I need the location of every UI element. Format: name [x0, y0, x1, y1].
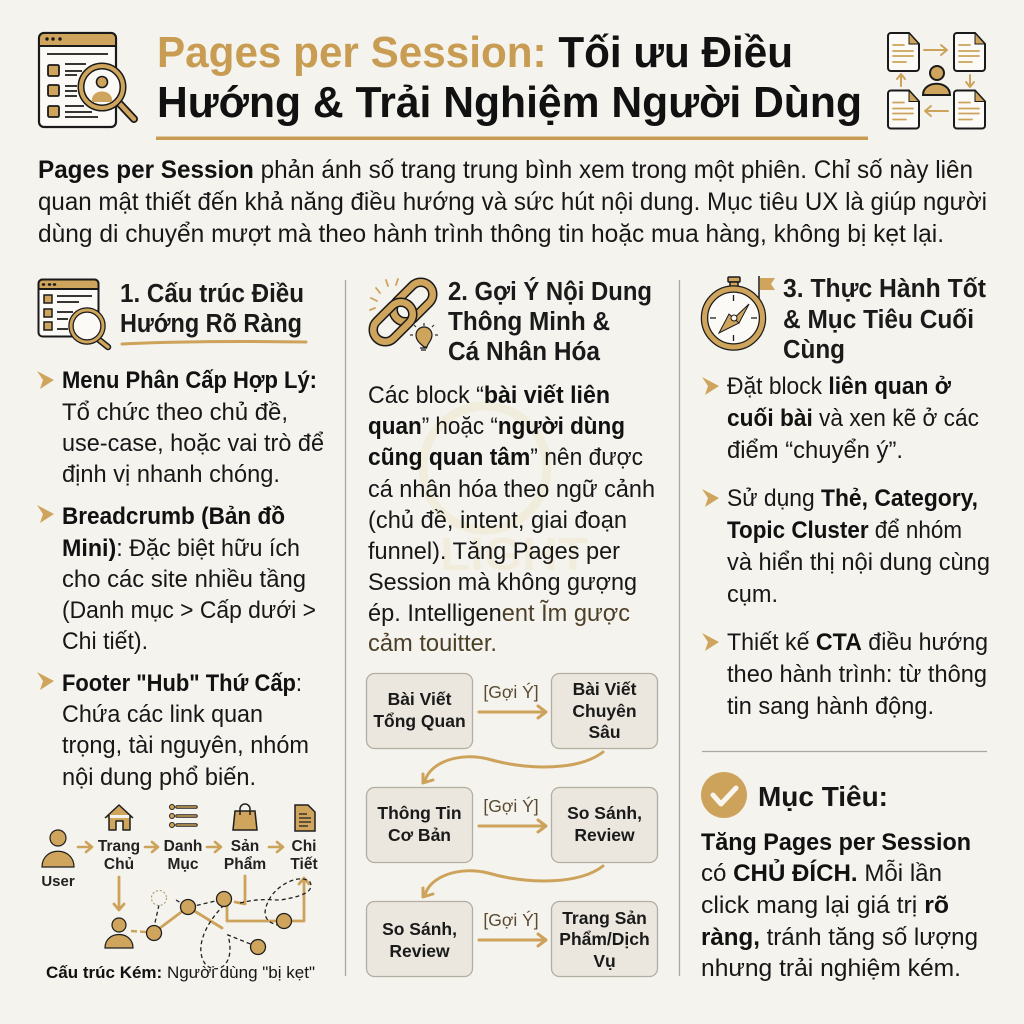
heading underline [122, 341, 306, 344]
row 2: [Gợi Ý] [483, 796, 539, 816]
bullet: block placement: Đặt block liên quan ở [727, 373, 952, 400]
goal text: có CHỦ ĐÍCH. Mỗi lần [701, 858, 942, 887]
bullet: menu: use-case, hoặc vai trò để [62, 430, 324, 457]
row 2: Cơ Bản [388, 825, 451, 845]
row 3: [Gợi Ý] [483, 910, 539, 930]
icon: chain with bulb [368, 277, 438, 350]
row 1: Bài Viết [388, 689, 452, 709]
goal text: Tăng Pages per Session [701, 829, 971, 856]
heading 1: Hướng Rõ Ràng [120, 310, 302, 338]
good flow: User [41, 873, 75, 890]
curved arrow 1 [423, 752, 603, 783]
heading 2 [448, 276, 652, 366]
good flow: Trang [98, 838, 140, 855]
bullet: breadcrumb: Breadcrumb (Bản đồ [62, 503, 285, 530]
paragraph: cũng quan tâm” nên được [368, 444, 643, 471]
goal text: ràng, tránh tăng số lượng [701, 924, 978, 951]
row 2: Review [574, 825, 635, 845]
icon: compass with flag [704, 276, 775, 347]
paragraph: (chủ đề, intent, giai đoạn [368, 507, 627, 534]
diagram: good vs poor navigation [41, 804, 318, 982]
bullet: breadcrumb: (Danh mục > Cấp dưới > [62, 597, 316, 624]
goal heading: Mục Tiêu: [758, 781, 888, 812]
flow boxes [366, 674, 658, 976]
row 3 [366, 902, 658, 976]
intro text: dùng di chuyển mượt mà theo hành trình thông tin hoặc mua hàng, không bị kẹt lại. [38, 220, 944, 248]
intro text [38, 156, 987, 248]
bullet: breadcrumb [37, 503, 316, 655]
bullet: block placement [702, 373, 979, 464]
row 1: Sâu [588, 722, 621, 742]
bullet: CTA: Thiết kế CTA điều hướng [727, 629, 988, 656]
paragraph: Session mà không gượng [368, 569, 637, 596]
goal text [701, 829, 978, 982]
paragraph: funnel). Tăng Pages per [368, 538, 620, 565]
row 3: Trang Sản [562, 908, 647, 928]
bullet: footer: nội dung phổ biến. [62, 764, 256, 791]
icon: window with magnifier [38, 280, 108, 347]
bullet: footer: Footer "Hub" Thứ Cấp: [62, 670, 302, 697]
column dividers [346, 280, 680, 976]
curved arrow 2 [423, 866, 603, 897]
bullet: CTA: theo hành trình: từ thông [727, 661, 987, 688]
diagram caption: Cấu trúc Kém: Người dùng "bị kẹt" [46, 963, 315, 982]
heading 1: 1. Cấu trúc Điều [120, 280, 304, 308]
paragraph: cá nhân hóa theo ngữ cảnh [368, 476, 655, 503]
paragraph: Các block “bài viết liên [368, 382, 610, 409]
good flow: Tiết [290, 856, 318, 873]
watermark: LIGHT [440, 528, 588, 580]
row 1: Chuyên [572, 701, 637, 721]
heading 3: Cùng [783, 336, 845, 364]
bullet: CTA: tin sang hành động. [727, 693, 934, 720]
intro text: Pages per Session phản ánh số trang trung bình xem trong một phiên. Chỉ số này liên [38, 156, 973, 184]
title: Hướng & Trải Nghiệm Người Dùng [157, 78, 862, 127]
panel: column 3 best practices [701, 275, 990, 982]
title [157, 28, 862, 127]
bullet: block placement: cuối bài và xen kẽ ở các [727, 405, 979, 432]
goal text: nhưng trải nghiệm kém. [701, 955, 961, 982]
bullet: tags: Topic Cluster để nhóm [727, 517, 962, 544]
intro text: quan mật thiết đến khả năng điều hướng và sức hút nội dung. Mục tiêu UX là giúp người [38, 188, 987, 216]
paragraph: ép. Intelligenent Ĩm gược [368, 600, 630, 627]
bullet: tags: cụm. [727, 581, 778, 608]
goal text: click mang lại giá trị rõ [701, 892, 949, 919]
row 3: Vụ [593, 951, 616, 971]
bullet: block placement: điểm “chuyển ý”. [727, 437, 903, 464]
bullet: breadcrumb: Mini): Đặc biệt hữu ích [62, 535, 300, 562]
heading 2: 2. Gợi Ý Nội Dung [448, 276, 652, 306]
paragraph: cảm touitter. [368, 630, 497, 657]
watermark [423, 406, 588, 580]
poor flow [105, 876, 311, 969]
paragraph: quan” hoặc “người dùng [368, 413, 625, 440]
paragraph [368, 382, 655, 657]
row 2 [366, 788, 658, 862]
good flow: Chủ [104, 856, 134, 873]
bullet: footer: Chứa các link quan [62, 701, 263, 728]
title: Pages per Session: Tối ưu Điều [157, 28, 793, 77]
bullet: menu [37, 367, 324, 488]
heading 1 [120, 280, 304, 338]
divider [702, 750, 987, 752]
good flow [41, 804, 318, 890]
heading 2: Cá Nhân Hóa [448, 338, 601, 366]
bullet: tags [702, 485, 990, 608]
bullet: footer [37, 670, 309, 791]
good flow: Sản [231, 838, 259, 855]
heading 3: 3. Thực Hành Tốt [783, 275, 986, 303]
bullet: menu: Menu Phân Cấp Hợp Lý: [62, 367, 317, 394]
row 1: Bài Viết [573, 679, 637, 699]
bullet: tags: và hiển thị nội dung cùng [727, 549, 990, 576]
row 1 [366, 674, 658, 748]
bullet: breadcrumb: Chi tiết). [62, 628, 148, 655]
row 3: Phẩm/Dịch [559, 929, 650, 949]
row 1: [Gợi Ý] [483, 682, 539, 702]
panel: column 1 navigation structure [37, 280, 324, 791]
bullet: footer: trọng, tài nguyên, nhóm [62, 732, 309, 759]
bullet: breadcrumb: cho các site nhiều tầng [62, 566, 306, 593]
heading 3: & Mục Tiêu Cuối [783, 306, 974, 334]
row 3: So Sánh, [382, 919, 457, 939]
row 1: Tổng Quan [373, 711, 466, 731]
panel: column 2 smart suggestions [366, 276, 658, 976]
row 2: Thông Tin [377, 803, 462, 823]
title underline [156, 136, 868, 140]
bullet: menu: định vị nhanh chóng. [62, 461, 280, 488]
row 3: Review [389, 941, 450, 961]
bullet: CTA [702, 629, 988, 720]
good flow: Phẩm [224, 856, 266, 873]
icon: pages flow around user [888, 33, 985, 128]
row 2: So Sánh, [567, 803, 642, 823]
bullet: tags: Sử dụng Thẻ, Category, [727, 485, 978, 512]
good flow: Mục [168, 856, 199, 873]
heading 2: Thông Minh & [448, 308, 610, 336]
icon: browser window with magnifier [39, 33, 134, 127]
good flow: Chi [292, 838, 316, 855]
good flow: Danh [164, 838, 202, 855]
heading 3 [783, 275, 986, 364]
bullet: menu: Tổ chức theo chủ đề, [62, 399, 288, 426]
icon: check circle [701, 772, 747, 818]
